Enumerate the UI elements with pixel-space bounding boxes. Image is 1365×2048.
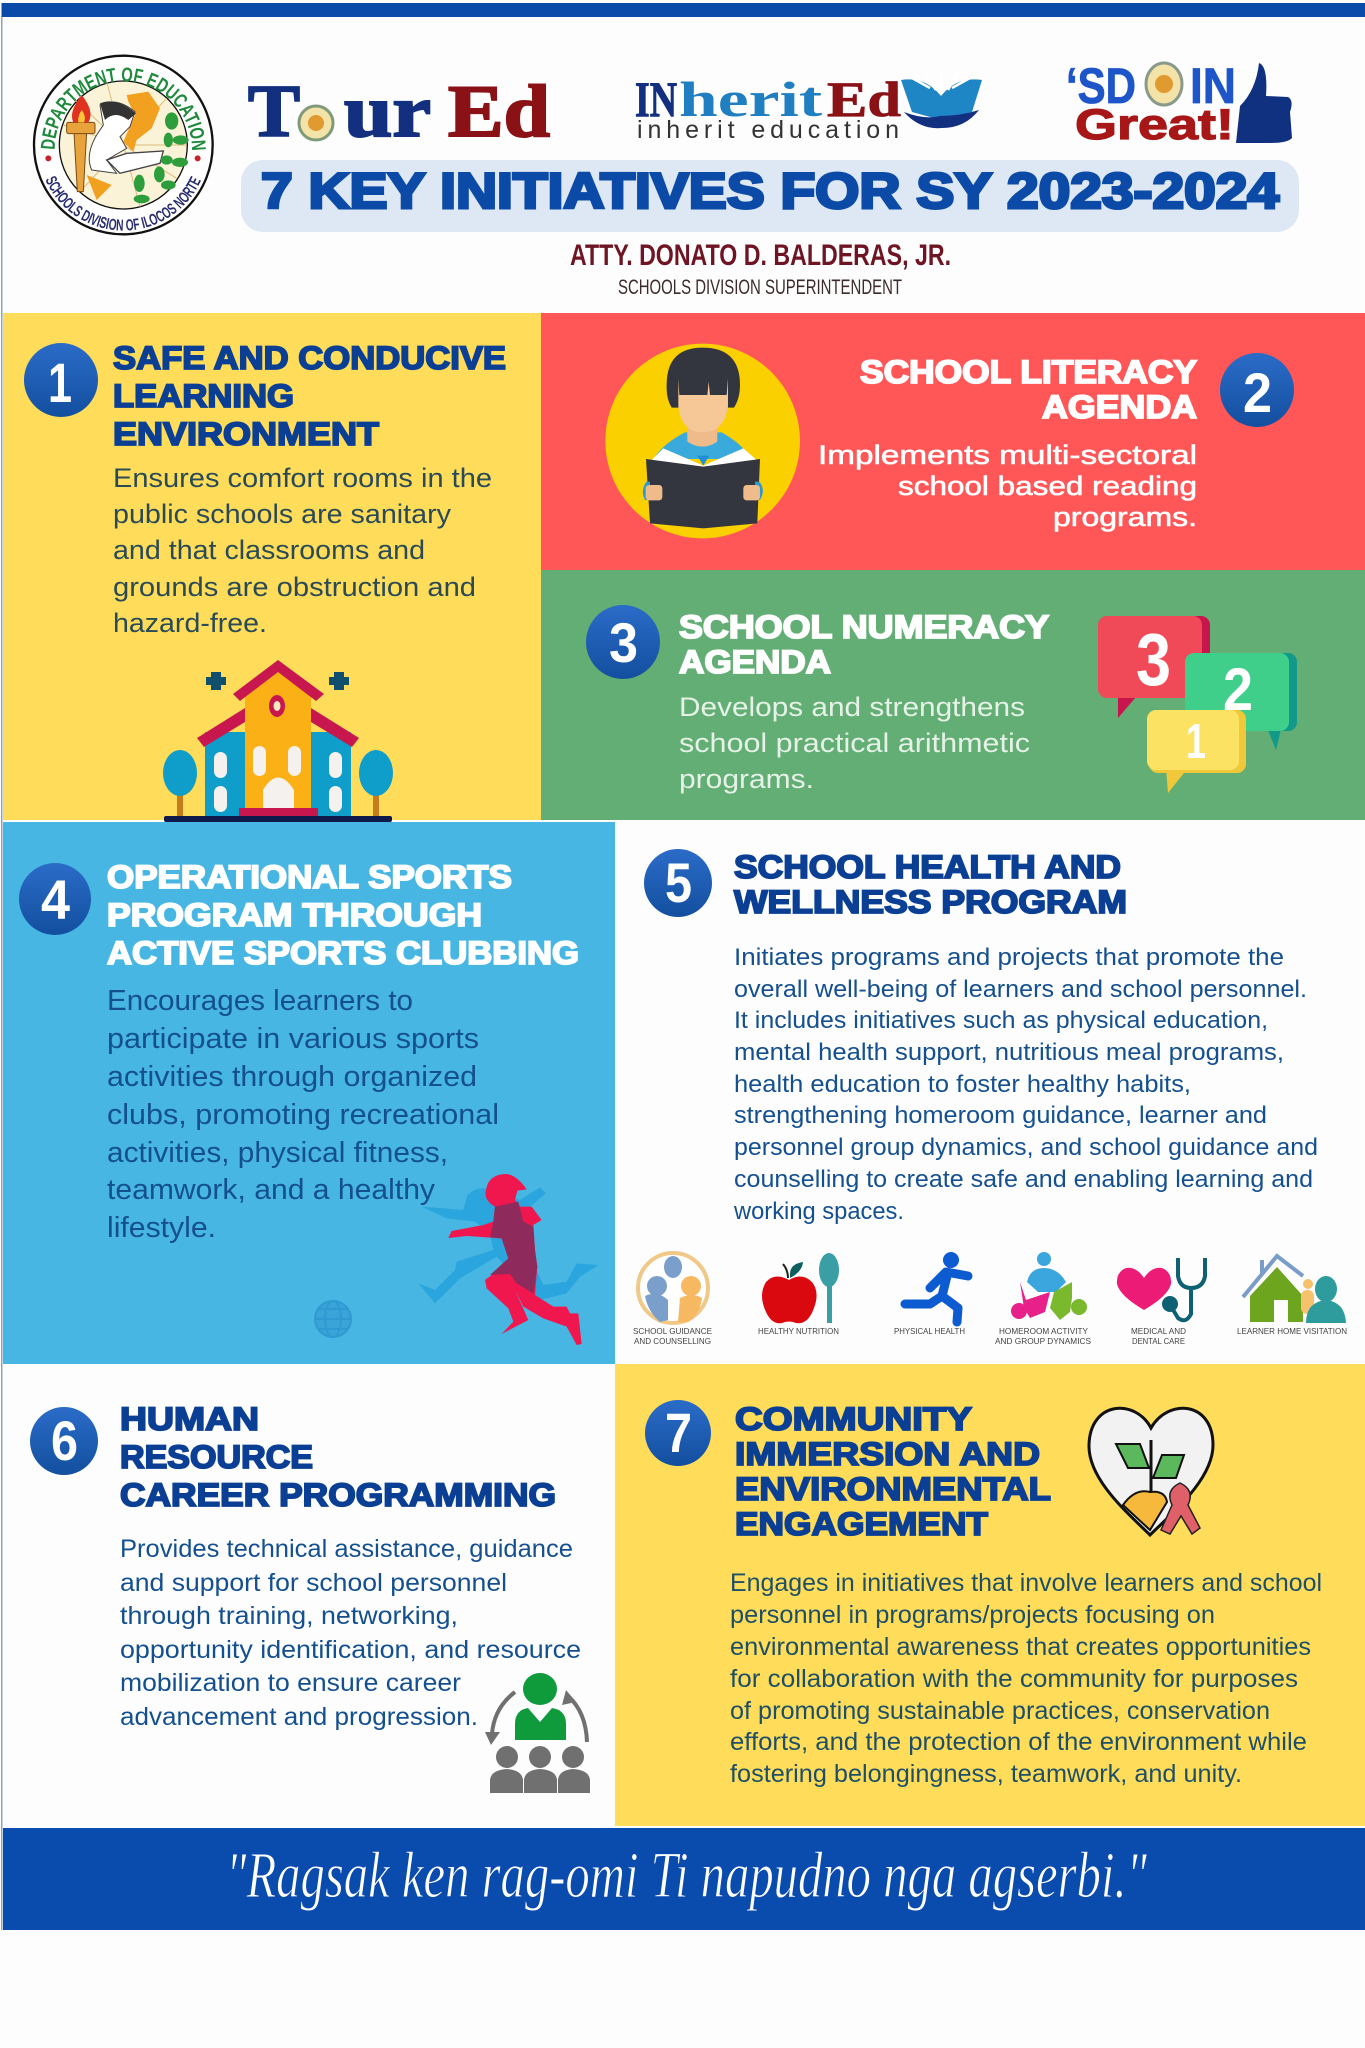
number badge 2 xyxy=(1220,353,1294,427)
body 7: of promoting sustainable practices, conservation xyxy=(730,1697,1270,1725)
number badge 6: 6 xyxy=(51,1409,78,1472)
heading 1: SAFE AND CONDUCIVE xyxy=(113,340,506,376)
body 1: and that classrooms and xyxy=(113,535,425,565)
body 2: school based reading xyxy=(898,471,1197,501)
body 2 xyxy=(818,440,1197,532)
body 5: Initiates programs and projects that promote the xyxy=(734,944,1284,971)
heading 6: HUMAN xyxy=(120,1401,259,1437)
heading 7: COMMUNITY xyxy=(735,1401,972,1437)
body 6: through training, networking, xyxy=(120,1602,458,1630)
logo: TourEd: Ed xyxy=(448,71,550,153)
body 1: grounds are obstruction and xyxy=(113,572,476,602)
body 4: participate in various sports xyxy=(107,1023,479,1055)
body 7: efforts, and the protection of the environment while xyxy=(730,1728,1307,1756)
icon: medical and dental care: MEDICAL AND xyxy=(1131,1326,1186,1336)
body 4 xyxy=(107,985,499,1244)
body 3: school practical arithmetic xyxy=(679,728,1030,758)
icon: physical health: PHYSICAL HEALTH xyxy=(894,1326,965,1336)
body 6 xyxy=(120,1535,581,1731)
body 1: public schools are sanitary xyxy=(113,499,452,529)
icon: numbered speech bubbles: 1 xyxy=(1186,715,1206,769)
number badge 1 xyxy=(24,343,98,417)
icon: numbered speech bubbles: 3 xyxy=(1136,618,1171,701)
body 7: Engages in initiatives that involve learners and school xyxy=(730,1569,1322,1597)
body 7: environmental awareness that creates opportunities xyxy=(730,1633,1311,1661)
heading 4: PROGRAM THROUGH xyxy=(107,897,482,933)
body 6: mobilization to ensure career xyxy=(120,1669,461,1697)
icon: numbered speech bubbles xyxy=(1098,616,1297,793)
number badge 7: 7 xyxy=(665,1401,692,1464)
panel 2: school literacy agenda xyxy=(541,313,1365,570)
body 4: activities, physical fitness, xyxy=(107,1137,448,1169)
body 3: Develops and strengthens xyxy=(679,692,1025,722)
icon: medical and dental care xyxy=(1117,1258,1205,1346)
body 1: Ensures comfort rooms in the xyxy=(113,463,492,493)
title pill: 7 KEY INITIATIVES FOR SY 2023-2024 xyxy=(261,163,1279,219)
panel 1: safe and conducive learning environment xyxy=(3,313,541,822)
icon: homeroom activity and group dynamics xyxy=(995,1252,1091,1346)
body 5 xyxy=(733,944,1318,1225)
logo: TourEd: ur xyxy=(344,71,431,153)
body 5: overall well-being of learners and school personnel. xyxy=(734,976,1307,1003)
logo: TourEd xyxy=(248,71,550,153)
icon: school building xyxy=(163,660,393,822)
icon: school guidance and counselling xyxy=(633,1253,712,1346)
heading 7: ENGAGEMENT xyxy=(735,1506,988,1542)
body 5: mental health support, nutritious meal programs, xyxy=(734,1039,1284,1066)
body 7 xyxy=(730,1569,1322,1788)
heading 5: WELLNESS PROGRAM xyxy=(734,884,1127,920)
icon: school guidance and counselling: SCHOOL GUIDANCE xyxy=(633,1326,712,1336)
number badge 3 xyxy=(586,605,660,679)
body 3 xyxy=(679,692,1030,794)
body 4: clubs, promoting recreational xyxy=(107,1099,499,1131)
icon: healthy nutrition: HEALTHY NUTRITION xyxy=(758,1326,839,1336)
icon: open book and hand xyxy=(901,68,982,128)
logo: SDOIN Great: ‘SD xyxy=(1066,58,1136,114)
heading 6: CAREER PROGRAMMING xyxy=(120,1477,556,1513)
body 4: activities through organized xyxy=(107,1061,477,1093)
logo: INheritEd xyxy=(635,68,982,144)
logo: INheritEd: IN xyxy=(635,71,677,127)
heading 3: SCHOOL NUMERACY xyxy=(679,609,1049,645)
heading 7 xyxy=(735,1401,1051,1542)
body 7: for collaboration with the community for purposes xyxy=(730,1665,1298,1693)
number badge 7 xyxy=(645,1400,711,1466)
body 6: advancement and progression. xyxy=(120,1703,478,1731)
superintendent name: ATTY. DONATO D. BALDERAS, JR. xyxy=(570,239,951,272)
body 5: working spaces. xyxy=(733,1198,904,1225)
icon: thumbs up xyxy=(1236,63,1292,143)
icon: homeroom activity and group dynamics: AND GROUP DYNAMICS xyxy=(995,1336,1091,1346)
heading 3: AGENDA xyxy=(679,644,831,680)
heading 1: LEARNING xyxy=(113,378,294,414)
heading 5: SCHOOL HEALTH AND xyxy=(734,849,1121,885)
body 5: It includes initiatives such as physical education, xyxy=(734,1007,1268,1034)
body 3: programs. xyxy=(679,764,814,794)
icon: homeroom activity and group dynamics: HOMEROOM ACTIVITY xyxy=(999,1326,1088,1336)
body 5: health education to foster healthy habits, xyxy=(734,1071,1191,1098)
heading 4 xyxy=(107,859,579,971)
number badge 5 xyxy=(644,849,712,917)
number badge 2: 2 xyxy=(1243,361,1272,424)
icon: faint globe ball xyxy=(315,1301,351,1337)
logo: SDOIN Great: IN xyxy=(1190,58,1236,114)
heading 2: AGENDA xyxy=(1042,389,1197,425)
seal lower lettering: SCHOOLS DIVISION OF ILOCOS NORTE xyxy=(46,176,201,231)
body 4: Encourages learners to xyxy=(107,985,413,1017)
heading 6: RESOURCE xyxy=(120,1439,313,1475)
heading 5 xyxy=(734,849,1127,920)
seal upper lettering: DEPARTMENT OF EDUCATION xyxy=(40,68,206,150)
body 1: hazard-free. xyxy=(113,608,267,638)
heading 4: ACTIVE SPORTS CLUBBING xyxy=(107,935,579,971)
body 6: Provides technical assistance, guidance xyxy=(120,1535,573,1563)
number badge 3: 3 xyxy=(609,611,638,674)
heading 3 xyxy=(679,609,1049,680)
logo: INheritEd: inherit education xyxy=(637,116,899,144)
body 5: strengthening homeroom guidance, learner and xyxy=(734,1102,1267,1129)
icon: numbered speech bubbles: 2 xyxy=(1223,656,1253,723)
body 1 xyxy=(113,463,492,638)
logo: Department of Education seal xyxy=(32,54,214,236)
superintendent role: SCHOOLS DIVISION SUPERINTENDENT xyxy=(618,276,902,299)
icon: medical and dental care: DENTAL CARE xyxy=(1132,1336,1185,1346)
heading 4: OPERATIONAL SPORTS xyxy=(107,859,512,895)
heading 2: SCHOOL LITERACY xyxy=(860,354,1197,390)
body 5: personnel group dynamics, and school guidance and xyxy=(734,1134,1318,1161)
body 7: personnel in programs/projects focusing on xyxy=(730,1601,1215,1629)
icon: learner home visitation: LEARNER HOME VISITATION xyxy=(1237,1326,1347,1336)
body 6: opportunity identification, and resource xyxy=(120,1636,581,1664)
number badge 1: 1 xyxy=(48,351,72,414)
illustration: running figure xyxy=(418,1174,598,1345)
icon: school guidance and counselling: AND COUNSELLING xyxy=(634,1336,711,1346)
body 6: and support for school personnel xyxy=(120,1569,507,1597)
body 7: fostering belongingness, teamwork, and unity. xyxy=(730,1760,1242,1788)
body 2: programs. xyxy=(1053,502,1197,532)
title pill xyxy=(241,160,1299,232)
icon: learner home visitation xyxy=(1237,1256,1347,1336)
number badge 4 xyxy=(19,863,91,935)
panel 7: community immersion and environmental engagement xyxy=(615,1364,1365,1826)
body 4: teamwork, and a healthy xyxy=(107,1174,436,1206)
logo: SDOIN Great: Great! xyxy=(1075,101,1234,149)
panel 3: school numeracy agenda xyxy=(541,570,1365,820)
body 4: lifestyle. xyxy=(107,1212,216,1244)
heading 2 xyxy=(860,354,1197,425)
footer banner with slogan xyxy=(3,1828,1365,1930)
heading 1 xyxy=(113,340,506,452)
icon: career leader and team xyxy=(485,1673,590,1793)
top banner bar xyxy=(2,3,1365,17)
panel 4: operational sports program xyxy=(3,822,615,1364)
heading 6 xyxy=(120,1401,556,1513)
heading 1: ENVIRONMENT xyxy=(113,416,380,452)
heading 7: ENVIRONMENTAL xyxy=(735,1471,1051,1507)
number badge 6 xyxy=(30,1407,98,1475)
body 5: counselling to create safe and enabling learning and xyxy=(734,1166,1313,1193)
icon: physical health xyxy=(894,1252,968,1336)
panel 5: school health and wellness program xyxy=(633,849,1347,1346)
heading 7: IMMERSION AND xyxy=(735,1436,1040,1472)
header xyxy=(32,54,1299,299)
icon: heart with sprout and ribbon xyxy=(1089,1408,1213,1535)
icon: healthy nutrition xyxy=(758,1253,839,1336)
number badge 4: 4 xyxy=(41,868,70,931)
panel 6: human resource career programming xyxy=(30,1401,590,1793)
body 2: Implements multi-sectoral xyxy=(818,440,1197,470)
number badge 5: 5 xyxy=(665,851,692,914)
logo: INheritEd: herit xyxy=(679,71,822,127)
illustration: student reading xyxy=(605,344,800,538)
logo: SDOIN Great xyxy=(1066,58,1292,149)
logo: INheritEd: Ed xyxy=(827,71,901,127)
logo: TourEd: T xyxy=(248,71,300,153)
